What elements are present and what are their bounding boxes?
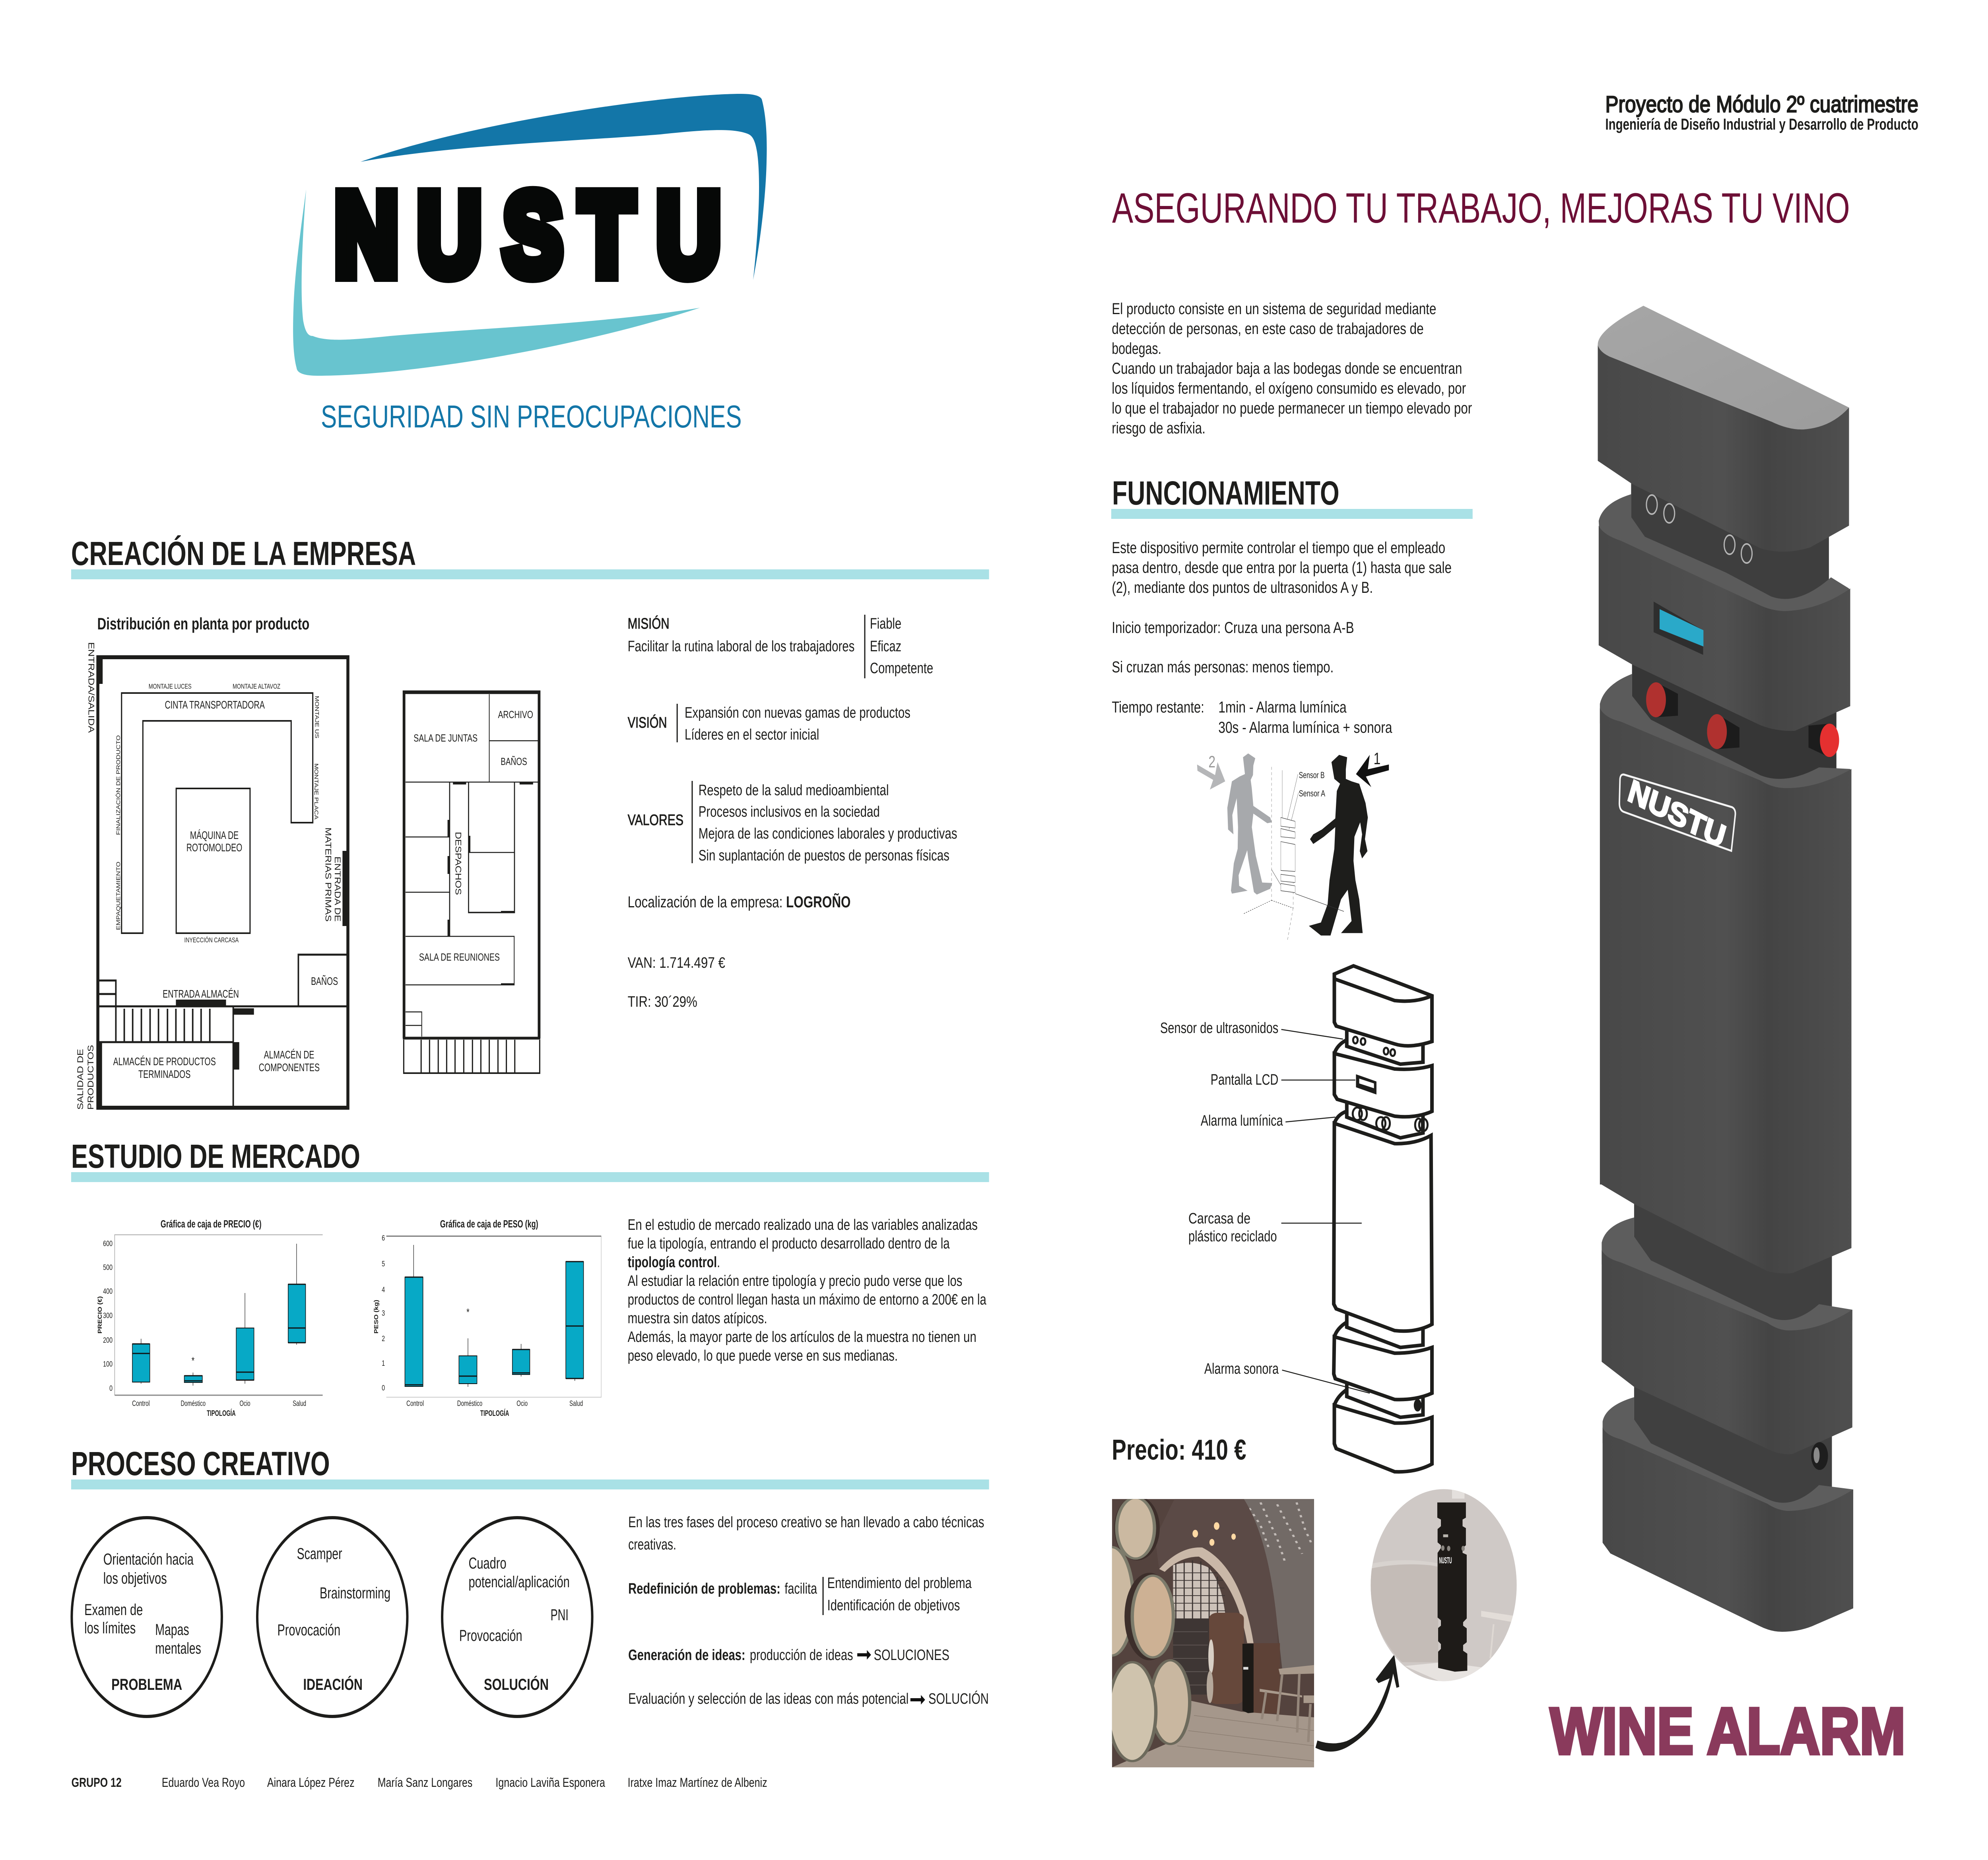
labels: despiece: Alarma sonora: [1204, 1361, 1279, 1377]
bevel base: [1603, 1397, 1853, 1531]
labels: despiece: Pantalla LCD: [1211, 1072, 1278, 1088]
text block: estudio de mercado: productos de control llegan hasta un máximo de entorno a 200€ en la: [628, 1291, 986, 1308]
bloque superior: [1334, 966, 1432, 1046]
datos financieros: TIR: 30´29%: [628, 994, 697, 1010]
chart: gráfica de caja de peso: *: [466, 1306, 470, 1318]
circle: solución: potencial/aplicación: [468, 1573, 570, 1591]
logo sobre carcasa: [1619, 773, 1736, 855]
valores: Procesos inclusivos en la sociedad: [699, 804, 880, 820]
labels: números y sensores: 2: [1208, 752, 1215, 771]
silhouette: persona saliendo (gris): [1227, 753, 1272, 895]
floor plan: planta baja: SALIDAD DE: [76, 1049, 85, 1110]
floor plan: planta baja: [76, 642, 348, 1110]
circle: ideación: Provocación: [278, 1621, 340, 1639]
floor plan: planta baja: FINALIZACIÓN DE PRODUCTO: [115, 735, 121, 835]
text block: proceso creativo: Identificación de objetivos: [827, 1597, 960, 1614]
visión: VISIÓN: [628, 714, 667, 731]
conectores: [1631, 479, 1829, 620]
text block: descripción del producto: los líquidos fermentando, el oxígeno consumido es elevado, por: [1112, 379, 1466, 397]
text block: proceso creativo: producción de ideas: [750, 1647, 853, 1664]
chart: gráfica de caja de precio: Salud: [293, 1399, 306, 1408]
bloque pantalla: [1334, 1054, 1432, 1117]
text block: funcionamiento: Si cruzan más personas: menos tiempo.: [1112, 658, 1334, 676]
labels: números y sensores: Sensor B: [1299, 771, 1325, 781]
barriles del fondo: [1209, 1613, 1244, 1704]
text block: estudio de mercado: peso elevado, lo que puede verse en sus medianas.: [628, 1347, 898, 1364]
conector base: [1347, 1377, 1423, 1417]
floor plan: planta superior: [403, 692, 540, 1073]
project header: [1605, 91, 1918, 133]
labels: números y sensores: [1208, 749, 1380, 799]
heading: proceso creativo: PROCESO CREATIVO: [71, 1445, 330, 1482]
text block: estudio de mercado: muestra sin datos atípicos.: [628, 1310, 767, 1327]
bloque pantalla: [1599, 526, 1850, 731]
circle: problema: PROBLEMA: [111, 1676, 182, 1693]
valores: Mejora de las condiciones laborales y productivas: [699, 825, 957, 842]
footer: grupo 12: [72, 1776, 767, 1790]
icon: arrow: [911, 1695, 925, 1705]
misión: MISIÓN: [628, 615, 670, 632]
photo: bodega con el dispositivo: [1112, 1499, 1314, 1767]
altavoz: [1811, 1442, 1828, 1470]
logo en detalle: NUSTU: [1439, 1556, 1452, 1566]
chart: gráfica de caja de peso: Gráfica de caja de PESO (kg): [440, 1218, 538, 1230]
footer: grupo 12: María Sanz Longares: [378, 1776, 472, 1790]
chart: gráfica de caja de precio: 200: [103, 1336, 113, 1345]
arrow: 2: [1197, 762, 1225, 790]
circle: solución: Provocación: [459, 1627, 522, 1644]
conector medio: [1347, 1097, 1423, 1138]
photo: detalle circular: [1369, 1487, 1518, 1683]
logo swoosh: blue: [361, 94, 767, 280]
text block: estudio de mercado: tipología control.: [628, 1254, 720, 1271]
chart: gráfica de caja de peso: Ocio: [516, 1399, 528, 1408]
circle: problema: los límites: [84, 1619, 136, 1637]
logo swoosh: teal: [293, 189, 700, 376]
logo sobre carcasa: NUSTU: [1624, 773, 1729, 855]
localización: Localización de la empresa: LOGROÑO: [628, 893, 851, 911]
chart: gráfica de caja de precio: Ocio: [239, 1399, 250, 1408]
pared de piedra: [1244, 1499, 1314, 1674]
floor plan: planta superior: SALA DE JUNTAS: [414, 732, 478, 744]
floor plan: planta baja: MONTAJE PLACA: [313, 763, 319, 819]
heading: creación de la empresa: [71, 535, 989, 579]
chart: gráfica de caja de precio: PRECIO (€): [96, 1296, 103, 1334]
chart: gráfica de caja de peso: Salud: [569, 1399, 583, 1408]
bloque base: [1334, 1405, 1432, 1472]
chart: gráfica de caja de peso: [373, 1218, 601, 1418]
carcasa: [1334, 1123, 1432, 1331]
circle: problema: los objetivos: [103, 1569, 167, 1587]
chart: gráfica de caja de precio: [96, 1218, 323, 1418]
circle: problema: Examen de: [84, 1601, 143, 1619]
chart: gráfica de caja de peso: 6: [382, 1234, 385, 1243]
text block: proceso creativo: SOLUCIÓN: [928, 1690, 989, 1707]
text block: estudio de mercado: En el estudio de mercado realizado una de las variables analizadas: [628, 1217, 978, 1233]
heading: creación de la empresa: CREACIÓN DE LA EMPRESA: [71, 535, 416, 572]
suelo: [1112, 1700, 1314, 1767]
arrow: curva: [1315, 1654, 1399, 1751]
valores: Sin suplantación de puestos de personas físicas: [699, 847, 949, 864]
heading: funcionamiento: [1111, 474, 1473, 519]
text block: descripción del producto: riesgo de asfixia.: [1112, 419, 1206, 437]
text block: funcionamiento: (2), mediante dos puntos de ultrasonidos A y B.: [1112, 579, 1373, 596]
text block: funcionamiento: Este dispositivo permite controlar el tiempo que el empleado: [1112, 539, 1445, 557]
labels: despiece: [1160, 1020, 1283, 1377]
text block: proceso creativo: facilita: [784, 1580, 817, 1597]
floor plan: planta superior: DESPACHOS: [453, 832, 462, 895]
footer: grupo 12: Ignacio Laviña Esponera: [495, 1776, 605, 1790]
render 3D: dispositivo Wine Alarm: [1598, 306, 1853, 1632]
heading: proceso creativo: [71, 1445, 989, 1489]
floor plan: planta baja: CINTA TRANSPORTADORA: [165, 699, 265, 711]
text block: proceso creativo: SOLUCIONES: [874, 1647, 949, 1664]
circle: ideación: [257, 1518, 407, 1716]
illustration: personas cruzando el sensor: [1197, 753, 1389, 940]
circle: problema: mentales: [155, 1639, 201, 1657]
floor plan: planta baja: BAÑOS: [311, 975, 338, 988]
visión: [628, 704, 911, 743]
text block: estudio de mercado: Además, la mayor parte de los artículos de la muestra no tienen un: [628, 1329, 977, 1345]
floor plan: planta baja: MÁQUINA DE: [190, 829, 239, 842]
floor plan: planta baja: ENTRADA DE: [333, 856, 342, 922]
chart: gráfica de caja de peso: PESO (kg): [373, 1300, 380, 1334]
floor plan: planta superior: ARCHIVO: [498, 709, 533, 720]
text block: proceso creativo: En las tres fases del proceso creativo se han llevado a cabo técnicas: [628, 1514, 984, 1531]
arrow: 1: [1356, 755, 1389, 787]
chart: gráfica de caja de precio: Control: [132, 1399, 150, 1408]
conector superior: [1347, 1025, 1423, 1064]
floor plan: planta baja: ENTRADA/SALIDA: [87, 642, 96, 733]
bloque base: [1603, 1427, 1853, 1632]
bevel bloque 4: [1602, 1217, 1852, 1352]
text block: funcionamiento: pasa dentro, desde que entra por la puerta (1) hasta que sale: [1112, 559, 1452, 577]
chart: gráfica de caja de precio: 400: [103, 1287, 113, 1296]
circle: solución: [442, 1518, 592, 1716]
text block: estudio de mercado: [628, 1217, 986, 1364]
bevel carcasa: [1600, 674, 1850, 807]
labels: números y sensores: 1: [1374, 749, 1380, 768]
visión: Expansión con nuevas gamas de productos: [685, 705, 911, 721]
chart: gráfica de caja de peso: TIPOLOGÍA: [480, 1408, 509, 1418]
floor plan: planta baja: ALMACÉN DE PRODUCTOS: [113, 1056, 216, 1068]
conector inferior: [1347, 1307, 1423, 1347]
text block: descripción del producto: bodegas.: [1112, 340, 1161, 357]
text block: proceso creativo: Generación de ideas:: [628, 1647, 746, 1664]
diagram: despiece del dispositivo: [1281, 966, 1432, 1472]
carcasa: [1600, 708, 1851, 1274]
datos financieros: [628, 955, 725, 1010]
botones rojos: [1646, 682, 1839, 757]
floor plan: planta baja: MONTAJE US: [314, 696, 320, 738]
text block: proceso creativo: creativas.: [628, 1536, 676, 1553]
chart: gráfica de caja de precio: 0: [109, 1384, 113, 1393]
text block: proceso creativo: Evaluación y selección de las ideas con más potencial: [628, 1691, 909, 1707]
silhouette: persona entrando (negro): [1309, 755, 1368, 936]
text block: descripción del producto: El producto consiste en un sistema de seguridad mediante: [1112, 300, 1436, 318]
bloque alarma sonora: [1334, 1337, 1432, 1400]
floor plan: planta baja: MATERIAS PRIMAS: [323, 827, 332, 922]
datos financieros: VAN: 1.714.497 €: [628, 955, 725, 971]
text block: descripción del producto: detección de personas, en este caso de trabajadores de: [1112, 320, 1424, 338]
chart: gráfica de caja de precio: Doméstico: [181, 1399, 206, 1408]
chart: gráfica de caja de precio: TIPOLOGÍA: [207, 1408, 236, 1418]
banco: [1260, 1665, 1314, 1703]
text block: descripción del producto: Cuando un trabajador baja a las bodegas donde se encuentran: [1112, 359, 1462, 377]
tagline: SEGURIDAD SIN PREOCUPACIONES: [321, 399, 742, 435]
dispositivo ampliado: [1437, 1503, 1467, 1672]
circle: problema: Mapas: [155, 1621, 189, 1639]
pantalla LCD: [1654, 602, 1703, 655]
chart: gráfica de caja de peso: Doméstico: [457, 1399, 482, 1408]
chart: gráfica de caja de precio: *: [192, 1355, 194, 1367]
heading: estudio de mercado: ESTUDIO DE MERCADO: [71, 1138, 360, 1175]
floor plan: planta baja: MONTAJE LUCES: [149, 683, 192, 691]
labels: despiece: Carcasa de: [1188, 1210, 1250, 1227]
chart: gráfica de caja de precio: 100: [103, 1360, 113, 1369]
sensores: [1646, 495, 1752, 563]
text block: descripción del producto: [1112, 300, 1472, 437]
misión: Facilitar la rutina laboral de los trabajadores: [628, 638, 854, 655]
misión: [628, 615, 933, 678]
text block: funcionamiento: 1min - Alarma lumínica: [1218, 698, 1347, 716]
sensores y alarmas: [1353, 1037, 1427, 1131]
footer: grupo 12: GRUPO 12: [72, 1776, 122, 1790]
visión: Líderes en el sector inicial: [685, 726, 819, 743]
heading: estudio de mercado: [71, 1138, 989, 1182]
floor plan: planta baja: TERMINADOS: [138, 1068, 190, 1081]
chart: gráfica de caja de peso: 5: [382, 1260, 385, 1268]
precio: Precio: 410 €: [1112, 1434, 1246, 1466]
luces: [1192, 1522, 1236, 1546]
footer: grupo 12: Eduardo Vea Royo: [162, 1776, 245, 1790]
text block: proceso creativo: [628, 1514, 989, 1707]
bloque 4: [1602, 1250, 1852, 1454]
labels: despiece: Sensor de ultrasonidos: [1160, 1020, 1278, 1037]
mini device and room lines: [1243, 767, 1344, 940]
floor plan: planta superior: SALA DE REUNIONES: [419, 951, 500, 963]
floor plan: planta baja: INYECCIÓN CARCASA: [184, 936, 239, 944]
icon: arrow: [857, 1650, 871, 1660]
chart: gráfica de caja de precio: Gráfica de caja de PRECIO (€): [161, 1218, 262, 1230]
circle: problema: Orientación hacia: [103, 1550, 194, 1568]
labels: despiece: Alarma lumínica: [1201, 1113, 1283, 1129]
text block: descripción del producto: lo que el trabajador no puede permanecer un tiempo elevado por: [1112, 399, 1472, 417]
floor plan: planta baja: EMPAQUETAMIENTO: [116, 862, 121, 930]
subheading: distribución en planta: Distribución en planta por producto: [97, 614, 309, 633]
heading: funcionamiento: FUNCIONAMIENTO: [1112, 474, 1340, 512]
text block: misión, visión, valores: [628, 615, 957, 1010]
chart: gráfica de caja de peso: Control: [406, 1399, 424, 1408]
text block: funcionamiento: Inicio temporizador: Cruza una persona A-B: [1112, 619, 1354, 637]
text block: proceso creativo: Redefinición de problemas:: [628, 1580, 780, 1597]
circle: ideación: Brainstorming: [320, 1584, 390, 1602]
misión: Competente: [870, 660, 933, 677]
circle: solución: SOLUCIÓN: [484, 1676, 549, 1693]
floor plan: planta baja: MONTAJE ALTAVOZ: [233, 683, 280, 691]
chart: gráfica de caja de peso: 3: [382, 1309, 385, 1318]
title: wine alarm: WINE ALARM: [1550, 1695, 1905, 1768]
text block: proceso creativo: Entendimiento del problema: [827, 1575, 972, 1592]
footer: grupo 12: Ainara López Pérez: [267, 1776, 355, 1790]
barriles: [1090, 1496, 1190, 1761]
misión: Fiable: [870, 615, 901, 632]
labels: números y sensores: Sensor A: [1299, 789, 1325, 799]
main title: ASEGURANDO TU TRABAJO, MEJORAS TU VINO: [1112, 184, 1850, 232]
misión: Eficaz: [870, 638, 901, 655]
circle: ideación: IDEACIÓN: [303, 1676, 363, 1693]
project header: Ingeniería de Diseño Industrial y Desarrollo de Producto: [1605, 115, 1918, 133]
bevel bloque pantalla: [1599, 494, 1849, 636]
valores: [628, 781, 957, 864]
máquina de rotomoldeo: [176, 788, 250, 933]
valores: Respeto de la salud medioambiental: [699, 782, 889, 799]
chart: gráfica de caja de peso: 4: [382, 1285, 385, 1294]
ventana con reja: [1173, 1563, 1226, 1618]
floor plan: planta baja: ALMACÉN DE: [264, 1049, 314, 1061]
floor plan: planta superior: BAÑOS: [501, 755, 527, 767]
text block: funcionamiento: Tiempo restante:: [1112, 698, 1204, 716]
chart: gráfica de caja de precio: 500: [103, 1263, 113, 1272]
floor plan: planta baja: ROTOMOLDEO: [186, 842, 242, 854]
text block: estudio de mercado: fue la tipología, entrando el producto desarrollado dentro de la: [628, 1235, 950, 1252]
circle: problema: [72, 1518, 222, 1716]
footer: grupo 12: Iratxe Imaz Martínez de Albeniz: [628, 1776, 767, 1790]
text block: estudio de mercado: Al estudiar la relación entre tipología y precio pudo verse que los: [628, 1273, 962, 1289]
cara superior: [1598, 306, 1849, 429]
logo: NUSTU: [293, 94, 767, 376]
circle: solución: PNI: [551, 1606, 569, 1624]
chart: gráfica de caja de peso: 1: [382, 1359, 385, 1368]
floor plan: planta baja: PRODUCTOS: [86, 1045, 95, 1110]
logo wordmark: NUSTU: [335, 169, 720, 300]
text block: funcionamiento: [1112, 539, 1452, 736]
bloque superior: [1598, 345, 1849, 552]
labels: despiece: plástico reciclado: [1188, 1228, 1277, 1245]
floor plan: planta baja: ENTRADA ALMACÉN: [163, 988, 239, 1000]
chart: gráfica de caja de precio: 600: [103, 1239, 113, 1248]
chart: gráfica de caja de peso: 0: [382, 1384, 385, 1392]
chart: gráfica de caja de precio: 300: [103, 1311, 113, 1320]
chart: gráfica de caja de peso: 2: [382, 1334, 385, 1343]
valores: VALORES: [628, 812, 683, 829]
text block: funcionamiento: 30s - Alarma lumínica + sonora: [1218, 718, 1392, 736]
circle: solución: Cuadro: [468, 1554, 507, 1572]
floor plan: planta baja: COMPONENTES: [259, 1062, 320, 1074]
cilindros alarma: [1656, 682, 1829, 757]
circle: ideación: Scamper: [297, 1545, 342, 1563]
project header: Proyecto de Módulo 2º cuatrimestre: [1605, 91, 1918, 117]
líneas de referencia: [1281, 1029, 1370, 1393]
arco de ladrillo: [1159, 1547, 1254, 1643]
dispositivo en la bodega: [1242, 1644, 1254, 1713]
